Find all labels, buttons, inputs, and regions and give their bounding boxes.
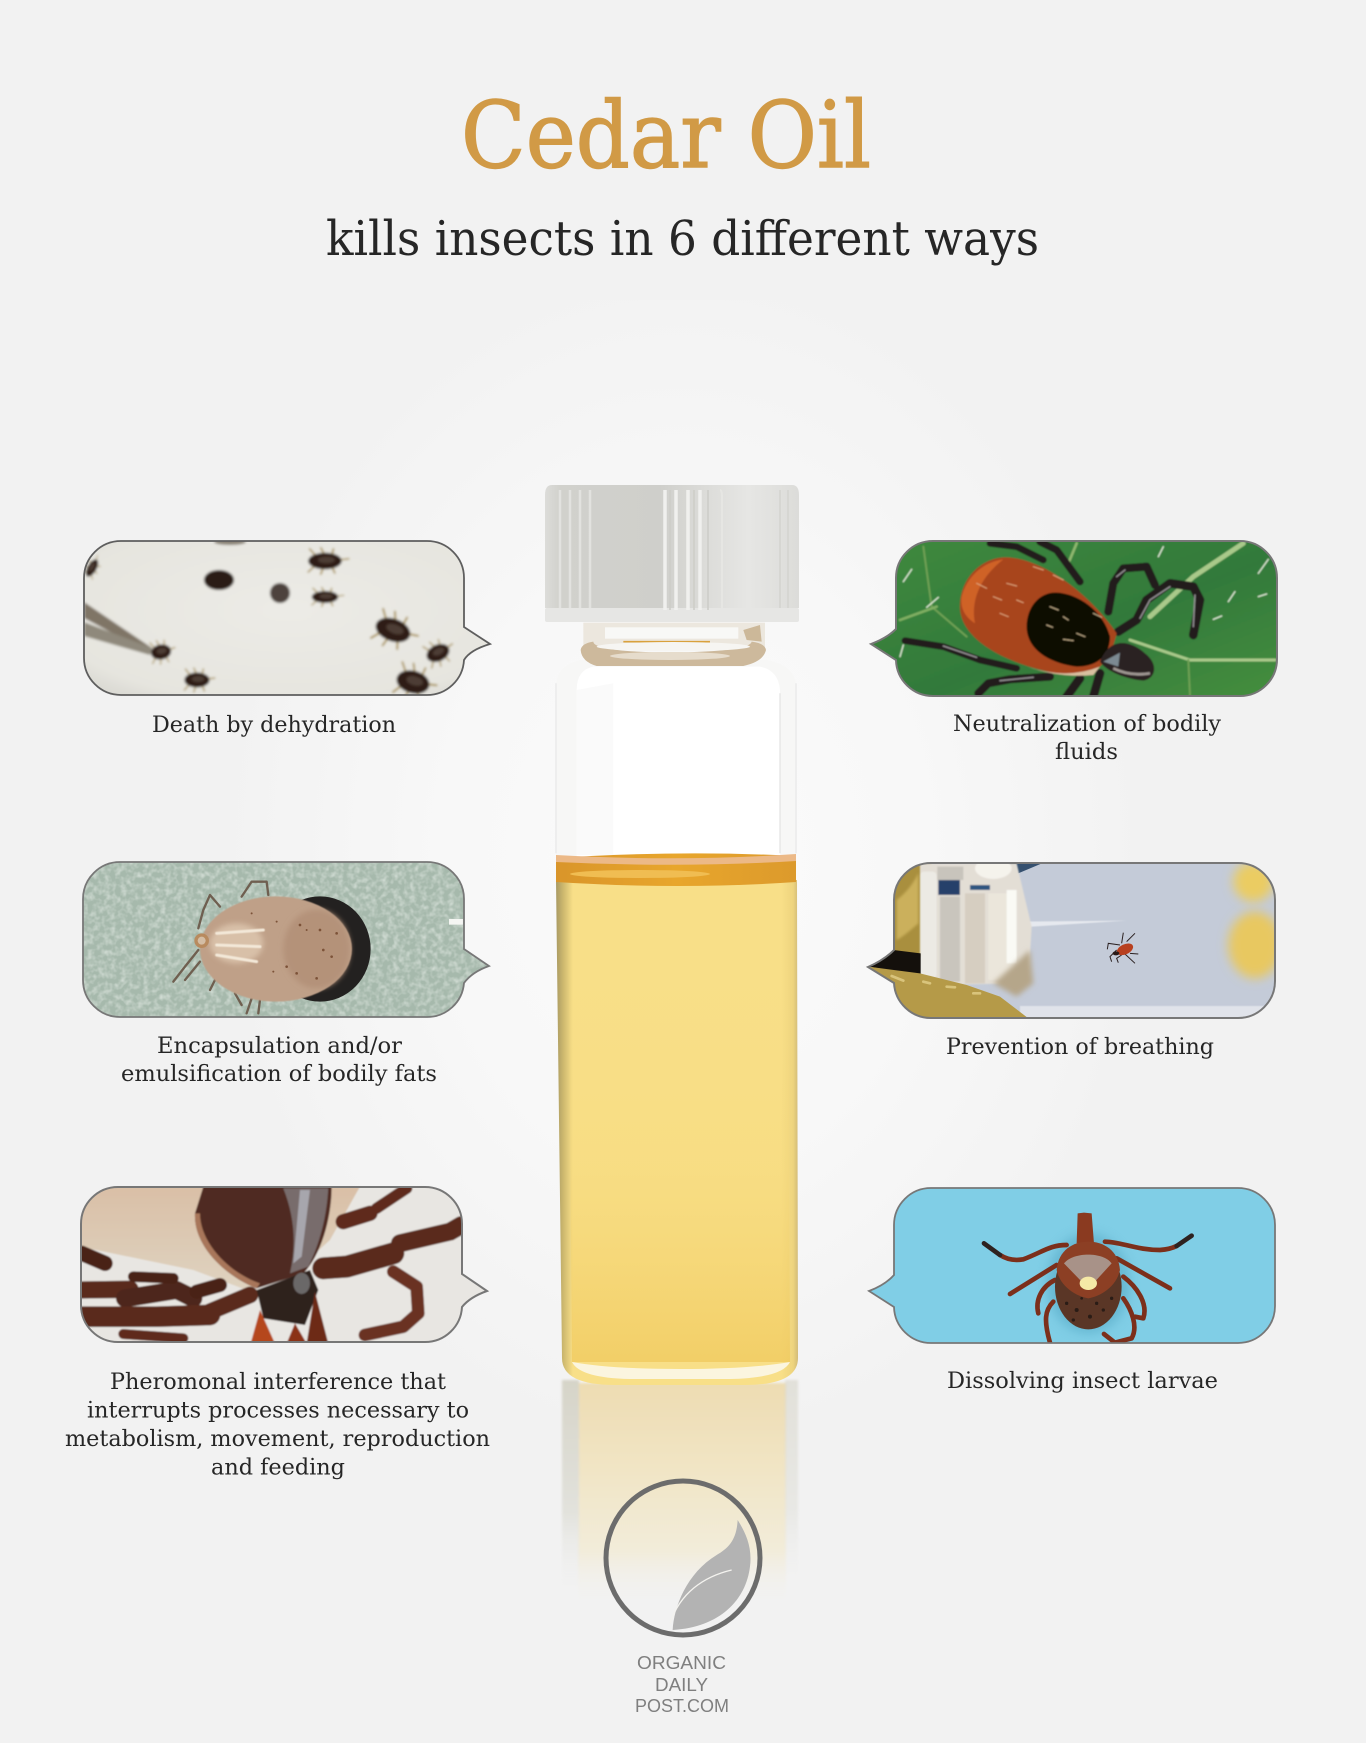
caption: metabolism, movement, reproduction: [65, 1427, 490, 1452]
speech bubble photo: tick on leaf: [867, 537, 1283, 700]
bubble outline: [868, 863, 1275, 1018]
speech bubble photo: engorged tick on fabric: [84, 862, 487, 1016]
caption: Pheromonal interference that: [110, 1370, 446, 1395]
panel: vial of cedar oil: [545, 485, 799, 1608]
vial glass body: [556, 660, 796, 870]
panel: neutralization of bodily fluids: [867, 537, 1283, 765]
logo text: [635, 1653, 729, 1716]
caption: fluids: [1055, 740, 1118, 765]
caption: [953, 712, 1222, 765]
caption: Neutralization of bodily: [953, 712, 1222, 737]
bubble outline: [871, 541, 1277, 696]
caption: and feeding: [211, 1456, 345, 1480]
vial reflection: [562, 1380, 798, 1608]
bubble outline: [869, 1188, 1275, 1343]
bubble outline: [81, 1187, 487, 1342]
panel: prevention of breathing: [867, 858, 1282, 1060]
logo text: DAILY: [655, 1675, 708, 1695]
panel: encapsulation or emulsification: [77, 857, 497, 1087]
bubble outline: [84, 541, 490, 695]
subtitle: kills insects in 6 different ways: [326, 211, 1039, 267]
caption: Death by dehydration: [152, 713, 396, 738]
speech bubble photo: ticks on paper: [84, 542, 488, 694]
caption: Dissolving insect larvae: [947, 1369, 1218, 1394]
caption: [65, 1370, 490, 1480]
caption: interrupts processes necessary to: [87, 1398, 469, 1424]
panel: dissolving insect larvae: [867, 1183, 1280, 1394]
vial cap: [545, 485, 799, 622]
caption: emulsification of bodily fats: [121, 1062, 437, 1087]
bubble outline: [83, 862, 489, 1017]
title: Cedar Oil: [461, 82, 871, 189]
caption: Encapsulation and/or: [157, 1034, 402, 1059]
vial neck: [581, 623, 766, 666]
speech bubble photo: tick on blue: [867, 1183, 1280, 1347]
speech bubble photo: close-up tick: [77, 1183, 493, 1347]
panel: pheromonal interference: [65, 1183, 493, 1480]
icon: leaf: [670, 1520, 751, 1630]
logo: organic daily post: [606, 1481, 760, 1716]
logo text: POST.COM: [635, 1696, 729, 1716]
logo text: ORGANIC: [637, 1653, 726, 1673]
vial oil: [556, 853, 798, 1385]
speech bubble photo: tick in glass vial: [870, 864, 1274, 1017]
icon: logo ring: [606, 1481, 760, 1635]
caption: Prevention of breathing: [946, 1035, 1214, 1060]
caption: [121, 1034, 437, 1087]
panel: death by dehydration: [78, 536, 498, 738]
